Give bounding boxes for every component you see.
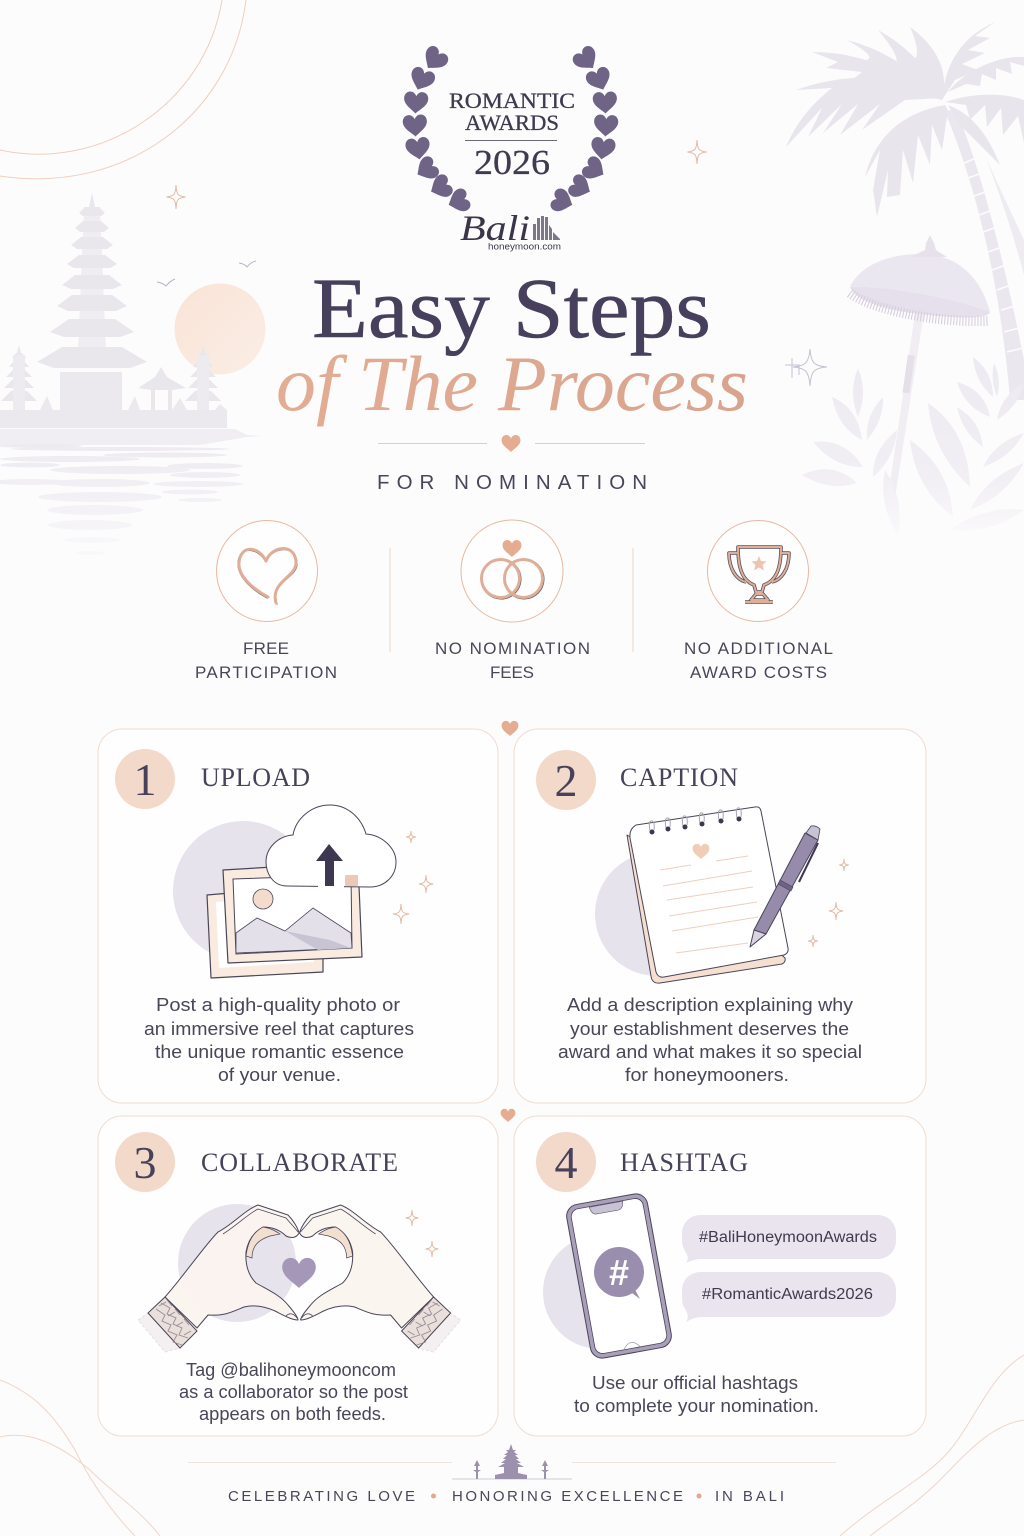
logo: Bali [460, 208, 530, 248]
label: FEES [490, 663, 534, 682]
description: Post a high-quality photo or [156, 995, 400, 1015]
award year: 2026 [474, 143, 550, 182]
heading: COLLABORATE [201, 1148, 398, 1177]
benefit: free participation [195, 520, 337, 682]
label [684, 639, 833, 682]
sun [174, 284, 266, 374]
description: to complete your nomination. [574, 1396, 819, 1416]
number badge: 4 [554, 1137, 578, 1188]
fronds [786, 22, 1024, 217]
number badge [536, 1132, 596, 1192]
icon: small heart [503, 540, 521, 557]
connector heart top [502, 721, 518, 736]
panel: step 1 upload [98, 729, 498, 1103]
footer tagline: HONORING EXCELLENCE [452, 1488, 683, 1505]
finial [910, 235, 947, 257]
second trunk [985, 155, 1024, 275]
award name [449, 88, 575, 135]
fringe [850, 293, 988, 321]
title [276, 260, 748, 427]
subtitle: FOR NOMINATION [377, 471, 647, 494]
decorative curves bottom corners [0, 1355, 1024, 1536]
logo [460, 208, 561, 252]
description: Use our official hashtags [592, 1373, 798, 1393]
number badge [115, 1132, 175, 1192]
pole band [903, 355, 915, 393]
icon: photo upload [173, 805, 433, 978]
main pagoda [37, 193, 147, 412]
pole [886, 300, 926, 510]
title: of The Process [276, 340, 748, 427]
small pagodas [1, 345, 221, 413]
description [179, 1360, 408, 1424]
description [558, 995, 862, 1085]
heading: HASHTAG [620, 1148, 748, 1177]
temple scene illustration [0, 193, 266, 555]
description: as a collaborator so the post [179, 1382, 408, 1402]
award name: ROMANTIC [449, 88, 575, 113]
divider [390, 548, 391, 652]
icon: heart [238, 548, 297, 604]
tropical leaves [802, 357, 1024, 535]
number badge: 1 [134, 754, 156, 805]
footer temple icon [188, 1444, 836, 1480]
panel: step 2 caption [514, 729, 926, 1103]
description: Tag @balihoneymooncom [186, 1360, 396, 1380]
label [435, 639, 590, 682]
connector heart bottom [501, 1109, 515, 1122]
description: Add a description explaining why [567, 995, 853, 1015]
lavender sparkle [785, 349, 827, 386]
decorative arcs top left [0, 0, 246, 179]
temple base wall [0, 392, 227, 428]
heading: CAPTION [620, 763, 738, 792]
hashtag bubble 2: #RomanticAwards2026 [702, 1286, 873, 1303]
water reflection [0, 444, 243, 555]
number badge: 3 [134, 1137, 156, 1188]
canopy dome [850, 254, 990, 312]
description: appears on both feeds. [199, 1404, 386, 1424]
icon: phone with hashtag [543, 1192, 673, 1360]
icon: heart hands [138, 1204, 461, 1352]
label: NO ADDITIONAL [684, 639, 833, 658]
panel: step 3 collaborate [98, 1116, 498, 1436]
number badge: 2 [554, 755, 578, 806]
icon: phone with hashtag: # [609, 1252, 629, 1293]
panel: step 4 hashtag [514, 1116, 926, 1436]
description [144, 995, 414, 1085]
trunk [945, 108, 1024, 400]
footer tagline [228, 1488, 784, 1505]
icon: notebook and pen [595, 807, 849, 983]
divider [632, 548, 634, 652]
logo: honeymoon.com [488, 242, 561, 252]
description: the unique romantic essence [155, 1042, 404, 1062]
number badge [115, 749, 175, 809]
pavilion [138, 367, 186, 412]
label: FREE [243, 639, 289, 658]
birds [157, 261, 256, 286]
description [574, 1373, 819, 1416]
label: NO NOMINATION [435, 639, 590, 658]
award badge [402, 44, 619, 251]
title heart divider [378, 435, 645, 452]
heart laurel [402, 44, 619, 216]
description: for honeymooners. [625, 1065, 789, 1085]
hashtag bubble 1: #BaliHoneymoonAwards [699, 1229, 877, 1246]
title: Easy Steps [312, 260, 711, 356]
description: award and what makes it so special [558, 1042, 862, 1062]
heading: UPLOAD [201, 763, 310, 792]
hashtag bubble 1 [682, 1215, 896, 1263]
shoreline [0, 429, 263, 445]
label [195, 639, 337, 682]
description: of your venue. [218, 1065, 341, 1085]
description: an immersive reel that captures [144, 1019, 414, 1039]
sparkles in header [166, 140, 707, 209]
palm tree [786, 22, 1024, 400]
icon: trophy [729, 547, 789, 602]
number badge [536, 750, 596, 810]
footer tagline: CELEBRATING LOVE [228, 1488, 415, 1505]
icon: rings [481, 559, 544, 599]
badge rule [465, 140, 557, 141]
benefit: no nomination fees [435, 520, 590, 682]
parasol umbrella [850, 235, 990, 510]
hashtag bubble 2 [682, 1272, 896, 1322]
benefit: no additional award costs [684, 520, 833, 682]
award name: AWARDS [465, 110, 559, 135]
description: your establishment deserves the [570, 1019, 849, 1039]
label: PARTICIPATION [195, 663, 337, 682]
canopy underside [850, 287, 990, 317]
label: AWARD COSTS [690, 663, 827, 682]
trunk rings [962, 158, 1023, 352]
footer tagline: IN BALI [715, 1488, 784, 1505]
